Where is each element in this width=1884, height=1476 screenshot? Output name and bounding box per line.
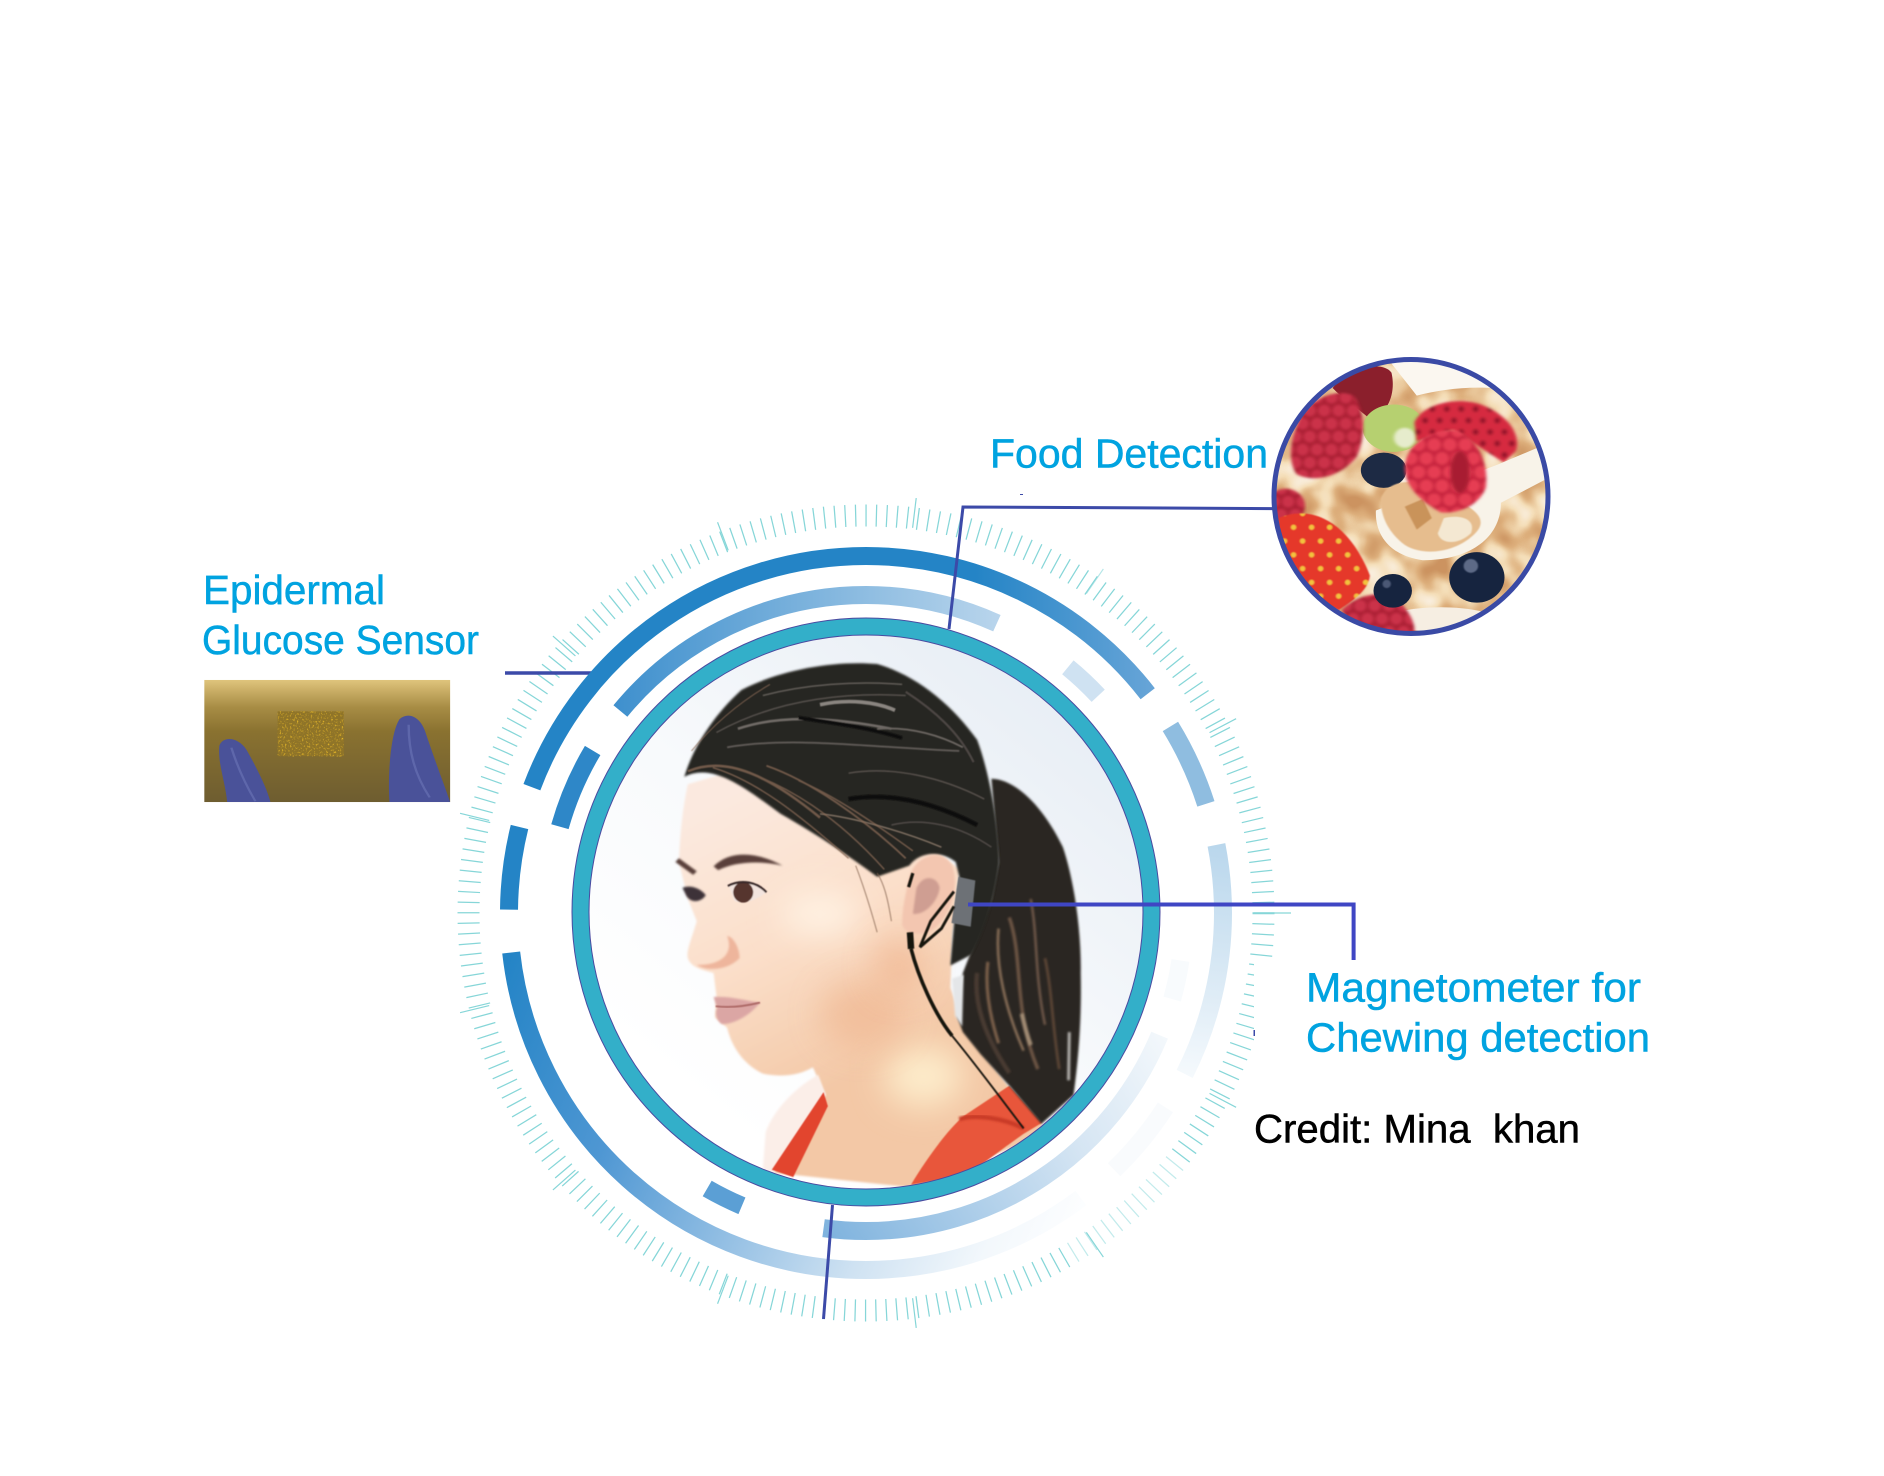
connector line: epidermal glucose sensor: [505, 671, 592, 675]
teal inner ring: [572, 618, 1160, 1206]
sensor photo: [204, 680, 450, 802]
raspberry left: [1291, 393, 1363, 478]
radial tick marks: [460, 498, 1294, 1328]
gap in hair at nape: [952, 975, 964, 1027]
near eye: [728, 882, 766, 903]
credit: Credit: Mina khan: [1254, 1108, 1580, 1152]
gold sensor patch: [278, 711, 344, 756]
label: magnetometer for chewing detection: Chewing detection: [1306, 1014, 1650, 1060]
connector line: food detection: [949, 494, 1273, 629]
connector line: magnetometer: [968, 904, 1354, 960]
shirt straps: [772, 1092, 828, 1177]
green grape: [1363, 404, 1425, 452]
gloved fingers: [219, 739, 270, 802]
outer segmented ring: [509, 556, 1223, 1270]
raspberry small left: [1276, 486, 1307, 522]
ponytail: [957, 779, 1081, 1124]
ponytail strands: [976, 899, 1069, 1080]
food photo circle: [1267, 354, 1555, 641]
strawberry bottom left: [1276, 513, 1370, 610]
label: food detection: Food Detection: [990, 430, 1268, 476]
strawberry top right: [1414, 401, 1517, 463]
spoon: [1376, 445, 1545, 560]
spoon contents: [1381, 482, 1481, 552]
label: epidermal glucose sensor: Epidermal: [203, 567, 385, 613]
near eyebrow: [714, 855, 782, 870]
connector line: bottom: [824, 1205, 832, 1319]
middle segmented ring: [548, 595, 1184, 1231]
photo: woman in profile wearing ear sensor: [659, 636, 1142, 1187]
blueberry middle: [1361, 453, 1407, 488]
label: magnetometer for chewing detection: Magnetometer for: [1306, 964, 1641, 1010]
far eyebrow and eye: [675, 858, 697, 875]
skin: [679, 762, 1041, 1188]
label: epidermal glucose sensor: Glucose Sensor: [202, 617, 479, 663]
granola and milk background: [1276, 364, 1546, 631]
ear-mounted magnetometer sensor: [951, 877, 975, 927]
raspberry centre: [1405, 430, 1486, 513]
hairline wisps: [688, 684, 913, 932]
bowl background: [1392, 362, 1490, 396]
label: epidermal glucose sensor: [202, 567, 479, 663]
far shoulder: [763, 1075, 825, 1173]
lips: [714, 997, 760, 1024]
wires and cable: [909, 873, 1024, 1128]
hair strands: [716, 683, 991, 847]
blueberries: [1449, 552, 1504, 603]
ear: [902, 855, 955, 934]
face shading: [781, 893, 859, 934]
label: magnetometer for chewing detection: [1306, 964, 1650, 1060]
nose shadow: [697, 936, 740, 969]
raspberry bottom: [1342, 594, 1415, 637]
main hair: [684, 663, 999, 966]
cherry: [1333, 366, 1393, 421]
